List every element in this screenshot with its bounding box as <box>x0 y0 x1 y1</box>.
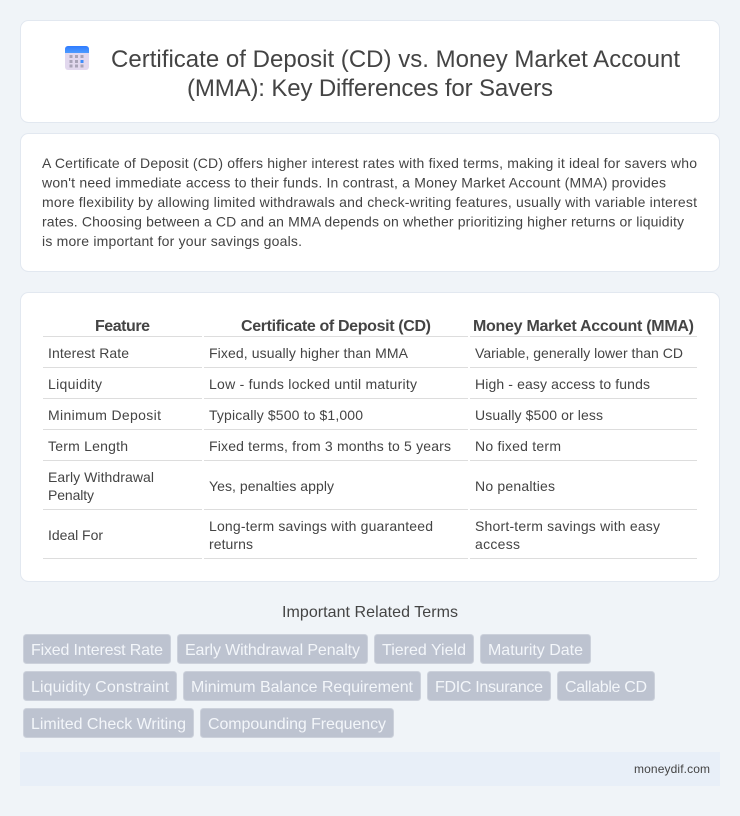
table row: interest rate: Fixed, usually higher than MMA <box>209 345 409 361</box>
table row: term length: Fixed terms, from 3 months to 5 years <box>209 438 451 454</box>
footer source text: moneydif.com <box>634 762 710 776</box>
table row: minimum deposit: Typically $500 to $1,000 <box>209 407 363 423</box>
table row: liquidity: High - easy access to funds <box>475 376 650 392</box>
tag: fdic insurance: FDIC Insurance <box>435 679 543 696</box>
tag: limited check writing: Limited Check Writing <box>31 716 186 733</box>
table row: ideal for: Long-term savings with guaranteed <box>209 518 433 534</box>
table row: early withdrawal penalty: Yes, penalties apply <box>209 478 334 494</box>
table row: interest rate <box>43 345 697 368</box>
panel: introduction <box>20 134 720 272</box>
table row: ideal for <box>43 518 697 559</box>
table row: early withdrawal penalty: No penalties <box>475 478 555 494</box>
text block: introduction paragraph: A Certificate of Deposit (CD) offers higher interest rates with fixed terms, making it ideal for savers who <box>42 155 697 171</box>
tag: fixed interest rate: Fixed Interest Rate <box>31 642 163 659</box>
footer band <box>20 752 720 786</box>
tag: callable cd: Callable CD <box>565 679 647 696</box>
tag: liquidity constraint: Liquidity Constraint <box>31 679 170 696</box>
title: Certificate of Deposit (CD) vs. Money Market Account <box>111 46 680 73</box>
tag: minimum balance requirement <box>184 672 420 700</box>
tag: callable cd <box>558 672 654 700</box>
tag: maturity date: Maturity Date <box>488 642 583 659</box>
tag: compounding frequency: Compounding Frequency <box>208 716 386 733</box>
tag: minimum balance requirement: Minimum Balance Requirement <box>191 679 414 696</box>
table row: interest rate: Interest Rate <box>48 345 129 361</box>
table row: ideal for: access <box>475 536 520 552</box>
title: (MMA): Key Differences for Savers <box>187 75 553 102</box>
tag: maturity date <box>480 634 590 664</box>
panel: comparison table <box>20 292 720 582</box>
table row: term length <box>43 438 697 461</box>
table row: minimum deposit <box>43 407 697 430</box>
tag: fixed interest rate <box>24 634 170 664</box>
table row: early withdrawal penalty: Early Withdrawal <box>48 469 154 485</box>
table row: early withdrawal penalty: Penalty <box>48 487 94 503</box>
table row: term length: Term Length <box>48 438 128 454</box>
tag: early withdrawal penalty <box>178 634 368 664</box>
text block: introduction paragraph: rates. Choosing between a CD and an MMA depends on whether prioritizing higher returns or liquidity <box>42 214 684 230</box>
tags: related terms <box>24 634 654 738</box>
text block: introduction paragraph <box>41 155 697 249</box>
tag: liquidity constraint <box>24 672 176 700</box>
table row: liquidity: Low - funds locked until maturity <box>209 376 417 392</box>
table row: ideal for: returns <box>209 536 253 552</box>
panel: title card <box>20 20 720 122</box>
tag: early withdrawal penalty: Early Withdrawal Penalty <box>185 642 360 659</box>
tag: tiered yield <box>374 634 474 664</box>
icon: calendar <box>65 46 89 70</box>
table row: liquidity: Liquidity <box>48 376 102 392</box>
table row: ideal for: Short-term savings with easy <box>475 518 660 534</box>
title <box>111 46 680 102</box>
tag: tiered yield: Tiered Yield <box>382 642 466 659</box>
table header: Feature <box>95 318 150 335</box>
text block: introduction paragraph: more flexibility by allowing limited withdrawals and check-writing features, usually with variable interest <box>42 194 697 210</box>
text block: introduction paragraph: won't need immediate access to their funds. In contrast, a Money Market Account (MMA) provides <box>41 174 666 190</box>
table row: liquidity <box>43 376 697 399</box>
heading: important related terms: Important Related Terms <box>282 604 458 621</box>
table row: minimum deposit: Usually $500 or less <box>475 407 603 423</box>
table header: Money Market Account (MMA) <box>473 318 694 335</box>
tag: fdic insurance <box>428 672 550 700</box>
table header: Certificate of Deposit (CD) <box>241 318 431 335</box>
tag: limited check writing <box>24 708 194 738</box>
table row: minimum deposit: Minimum Deposit <box>48 407 161 423</box>
table row: interest rate: Variable, generally lower than CD <box>475 345 683 361</box>
table header <box>43 318 697 337</box>
tag: compounding frequency <box>200 708 394 738</box>
table row: term length: No fixed term <box>475 438 561 454</box>
table row: early withdrawal penalty <box>43 469 697 510</box>
text block: introduction paragraph: is more important for your savings goals. <box>42 233 302 249</box>
table row: ideal for: Ideal For <box>48 527 103 543</box>
